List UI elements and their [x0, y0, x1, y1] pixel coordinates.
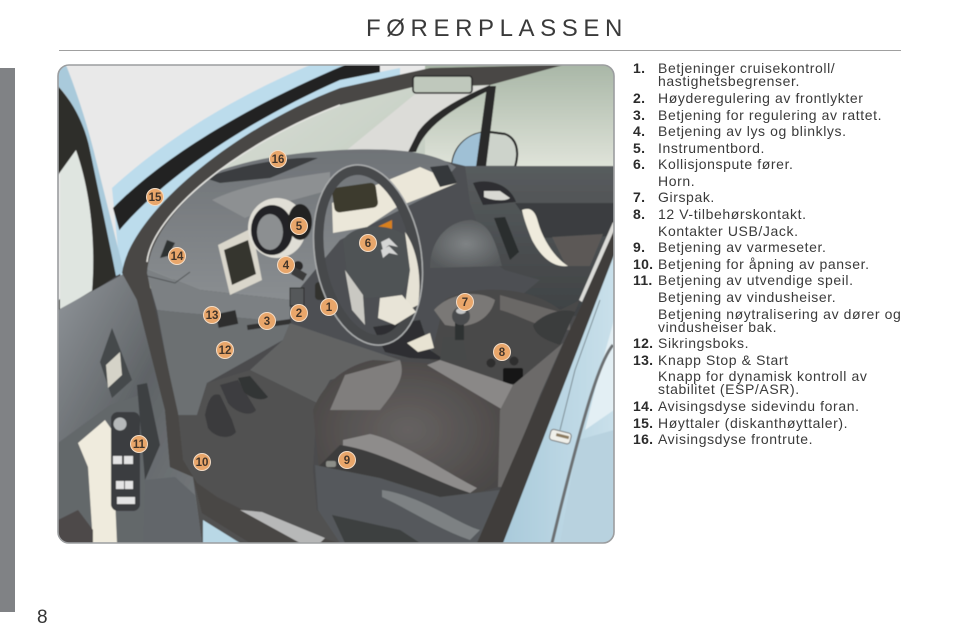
floor	[250, 323, 400, 403]
sill plate	[240, 510, 325, 543]
numbered legend: Betjening nøytralisering av dører og	[658, 306, 901, 322]
callout numbers: 10	[196, 457, 208, 469]
gear lever	[440, 357, 444, 360]
callout numbers: 16	[272, 154, 284, 166]
pedals	[205, 394, 236, 437]
callout numbers: 7	[462, 297, 468, 309]
numbered legend: 2.	[633, 90, 645, 106]
illustration: car interior	[58, 65, 616, 543]
blue door exterior	[503, 255, 614, 543]
lower knee panel	[145, 268, 290, 323]
numbered legend: 8.	[633, 206, 645, 222]
steering column	[373, 320, 445, 360]
black roof seal	[112, 66, 381, 230]
callout numbers: 3	[264, 316, 270, 328]
sidebar strip	[0, 68, 15, 612]
wheel spokes and hub	[343, 226, 412, 298]
callout numbers: 1	[326, 302, 333, 314]
numbered legend: Avisingsdyse frontrute.	[658, 431, 813, 447]
left air vent	[218, 228, 262, 295]
numbered legend: 12 V-tilbehørskontakt.	[658, 206, 807, 222]
callout numbers: 9	[344, 455, 350, 467]
numbered legend: Knapp for dynamisk kontroll av	[658, 368, 867, 384]
numbered legend: 3.	[633, 107, 645, 123]
rear view mirror	[413, 76, 472, 93]
callout numbers: 8	[499, 347, 506, 359]
door pull recess	[137, 383, 160, 480]
numbered legend: Instrumentbord.	[658, 140, 765, 156]
title: FØRERPLASSEN	[366, 15, 628, 42]
numbered legend: Sikringsboks.	[658, 335, 749, 351]
numbered legend: Betjening av lys og blinklys.	[658, 123, 847, 139]
left door frame	[58, 86, 118, 292]
numbered legend: Horn.	[658, 173, 695, 189]
centre cream dash	[332, 167, 457, 233]
stalks and controls	[293, 261, 303, 271]
windscreen	[147, 80, 440, 290]
callout numbers: 2	[296, 308, 302, 320]
switch panel	[111, 412, 140, 511]
numbered legend: Girspak.	[658, 189, 715, 205]
callout numbers: 12	[219, 345, 231, 357]
numbered legend: Høyderegulering av frontlykter	[658, 90, 864, 106]
left door handle recess	[100, 328, 132, 398]
panel border	[58, 65, 614, 543]
callout numbers: 4	[283, 260, 290, 272]
mirror switch	[494, 217, 519, 260]
numbered legend: Avisingsdyse sidevindu foran.	[658, 398, 860, 414]
numbered legend: 6.	[633, 156, 645, 172]
numbered legend: 1.	[633, 60, 645, 76]
callout numbers: 5	[296, 221, 303, 233]
numbered legend	[633, 60, 901, 447]
numbered legend: 16.	[633, 431, 653, 447]
door latch	[549, 429, 572, 444]
dashboard lower centre	[445, 160, 538, 293]
numbered legend: stabilitet (ESP/ASR).	[658, 381, 800, 397]
exterior mirror	[452, 132, 517, 167]
passenger seat and console	[433, 290, 578, 354]
numbered legend: Betjening av vindusheiser.	[658, 289, 836, 305]
sky behind door	[58, 66, 425, 300]
numbered legend: 11.	[633, 272, 653, 288]
right door handle	[473, 181, 516, 205]
numbered legend: 5.	[633, 140, 645, 156]
seat base	[315, 465, 505, 543]
instrument binnacle	[248, 198, 306, 258]
numbered legend: Knapp Stop & Start	[658, 352, 789, 368]
front pillar and sill	[122, 65, 563, 543]
numbered legend: 13.	[633, 352, 653, 368]
numbered legend: 9.	[633, 239, 645, 255]
numbered legend: 7.	[633, 189, 645, 205]
door pocket	[143, 477, 202, 543]
callout numbers: 11	[133, 439, 146, 451]
outer blue roof strip	[112, 66, 344, 276]
callout numbers	[130, 150, 510, 470]
cream grab handle	[78, 420, 117, 543]
numbered legend: vindusheiser bak.	[658, 319, 777, 335]
numbered legend: hastighetsbegrenser.	[658, 73, 800, 89]
title rule	[59, 50, 901, 51]
callout numbers: 14	[171, 251, 184, 263]
numbered legend: Betjening av varmeseter.	[658, 239, 826, 255]
inner blue roof strip	[118, 68, 400, 250]
right door panel	[465, 166, 614, 316]
numbered legend: Kollisjonspute fører.	[658, 156, 794, 172]
numbered legend: 14.	[633, 398, 653, 414]
numbered legend: Betjening for regulering av rattet.	[658, 107, 882, 123]
left window	[60, 150, 93, 310]
callout numbers: 6	[365, 238, 371, 250]
page number: 8	[37, 607, 48, 628]
numbered legend: Høyttaler (diskanthøyttaler).	[658, 415, 848, 431]
left door panel	[58, 274, 198, 514]
numbered legend: 12.	[633, 335, 653, 351]
numbered legend: 15.	[633, 415, 653, 431]
numbered legend: Kontakter USB/Jack.	[658, 223, 799, 239]
driver seat	[316, 360, 483, 474]
numbered legend: 4.	[633, 123, 645, 139]
callout numbers: 13	[206, 310, 218, 322]
callout numbers: 15	[149, 192, 162, 204]
numbered legend: Betjening av utvendige speil.	[658, 272, 854, 288]
base dark fill	[58, 274, 591, 542]
steering wheel	[300, 156, 436, 354]
numbered legend: 10.	[633, 256, 653, 272]
white side pillar	[347, 85, 490, 152]
numbered legend: Betjeninger cruisekontroll/	[658, 60, 835, 76]
dashboard upper	[145, 149, 456, 300]
numbered legend: Betjening for åpning av panser.	[658, 256, 870, 272]
door seal band	[477, 220, 614, 543]
console sockets	[486, 358, 496, 368]
side window	[425, 65, 614, 168]
